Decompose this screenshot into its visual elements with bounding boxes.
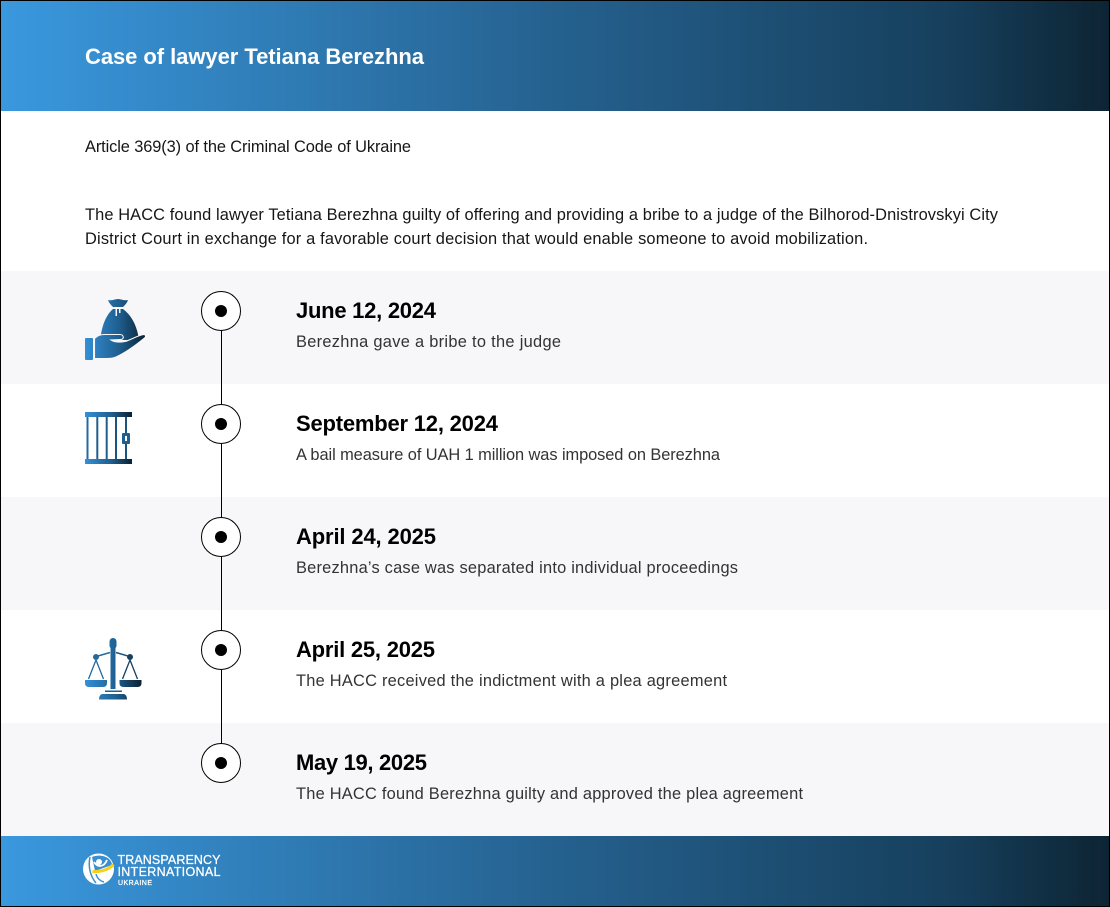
timeline connector [220,311,222,763]
description: Berezhna’s case was separated into individual proceedings [296,559,738,577]
footer band [1,836,1109,906]
description: Berezhna gave a bribe to the judge [296,333,561,351]
date: May 19, 2025 [296,750,427,775]
date: April 25, 2025 [296,637,435,662]
icon: scales of justice [85,638,142,700]
marker [202,630,240,670]
date: September 12, 2024 [296,411,499,436]
legal article reference: Article 369(3) of the Criminal Code of Ukraine [85,138,411,156]
date: April 24, 2025 [296,524,436,549]
date: June 12, 2024 [296,298,437,323]
description: The HACC found Berezhna guilty and approved the plea agreement [296,785,803,803]
marker [202,518,240,556]
description: The HACC received the indictment with a plea agreement [296,672,727,690]
header band [1,1,1109,111]
title: Case of lawyer Tetiana Berezhna [85,44,425,69]
row backgrounds [1,271,1109,836]
icon: prison bars [85,412,132,464]
icon: money bag on hand [85,299,146,360]
marker [202,404,240,444]
timeline entry: June 12, 2024 [202,292,561,351]
logo wordmark: TRANSPARENCY [118,853,221,867]
timeline entry: April 24, 2025 [202,518,738,577]
marker [202,744,240,782]
logo emblem [83,854,114,884]
marker [202,292,240,330]
timeline entry: April 25, 2025 [202,630,727,690]
timeline entry: May 19, 2025 [202,744,803,803]
case summary: The HACC found lawyer Tetiana Berezhna guilty of offering and providing a bribe to a judge of the Bilhorod-Dnistrovskyi City [85,206,999,224]
logo wordmark [118,853,221,887]
case summary: District Court in exchange for a favorable court decision that would enable someone to avoid mobilization. [85,230,868,248]
logo: Transparency International Ukraine [83,853,221,887]
timeline entry: September 12, 2024 [202,404,721,464]
logo wordmark: INTERNATIONAL [118,865,221,879]
case summary [85,206,999,248]
logo wordmark: UKRAINE [118,880,152,887]
description: A bail measure of UAH 1 million was imposed on Berezhna [296,446,721,464]
